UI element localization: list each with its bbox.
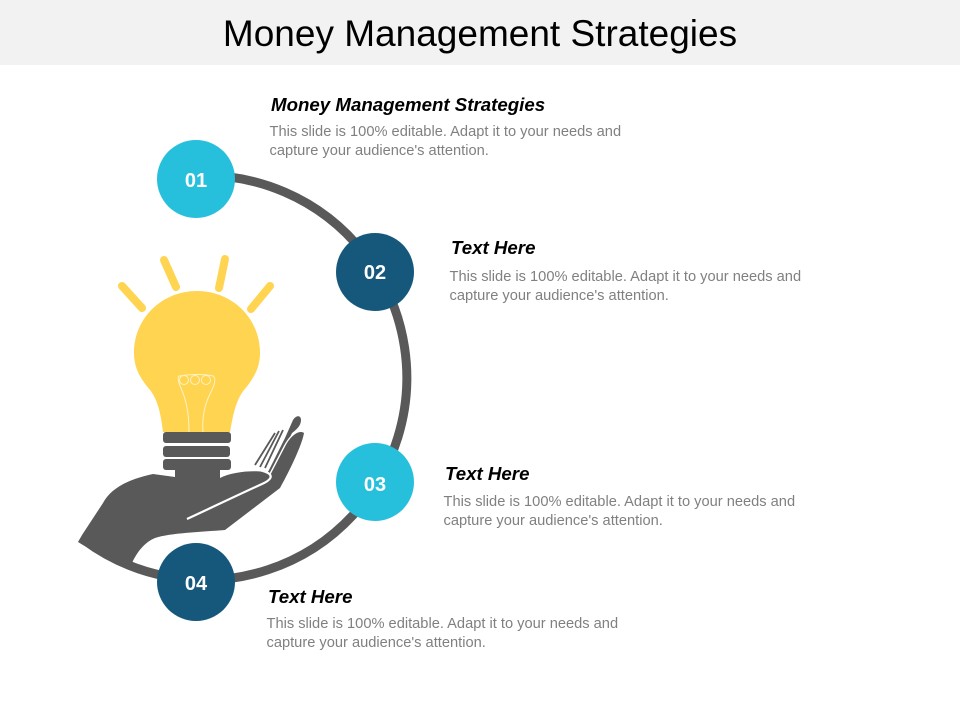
text block 01: Money Management Strategies [271, 94, 545, 115]
icon: light rays [122, 259, 270, 309]
text block 04: Text Here [268, 586, 352, 607]
ring arc [84, 176, 407, 580]
icon: light bulb [134, 291, 260, 432]
text block 01 [270, 94, 621, 158]
text block 01: This slide is 100% editable. Adapt it to your needs and [270, 124, 621, 140]
icon: bulb base [163, 432, 231, 470]
icon: hand [78, 416, 304, 563]
node 04 [157, 543, 235, 621]
title: Money Management Strategies [223, 13, 737, 54]
text block 01: capture your audience's attention. [270, 142, 489, 158]
text block 03 [444, 463, 795, 528]
text block 02: capture your audience's attention. [450, 288, 669, 304]
text block 02 [450, 237, 801, 304]
node 03 [336, 443, 414, 521]
node 03: 03 [364, 474, 386, 496]
text block 03: capture your audience's attention. [444, 512, 663, 528]
text block 04 [266, 586, 618, 650]
node 01 [157, 140, 235, 218]
node 04: 04 [185, 573, 208, 595]
text block 04: capture your audience's attention. [266, 634, 486, 650]
text block 04: This slide is 100% editable. Adapt it to your needs and [266, 616, 618, 632]
node 02: 02 [364, 262, 386, 284]
text block 03: Text Here [445, 463, 529, 484]
node 02 [336, 233, 414, 311]
text block 02: This slide is 100% editable. Adapt it to your needs and [450, 269, 801, 285]
node 01: 01 [185, 170, 207, 192]
text block 02: Text Here [451, 237, 535, 258]
text block 03: This slide is 100% editable. Adapt it to your needs and [444, 494, 795, 510]
title band [0, 0, 960, 65]
